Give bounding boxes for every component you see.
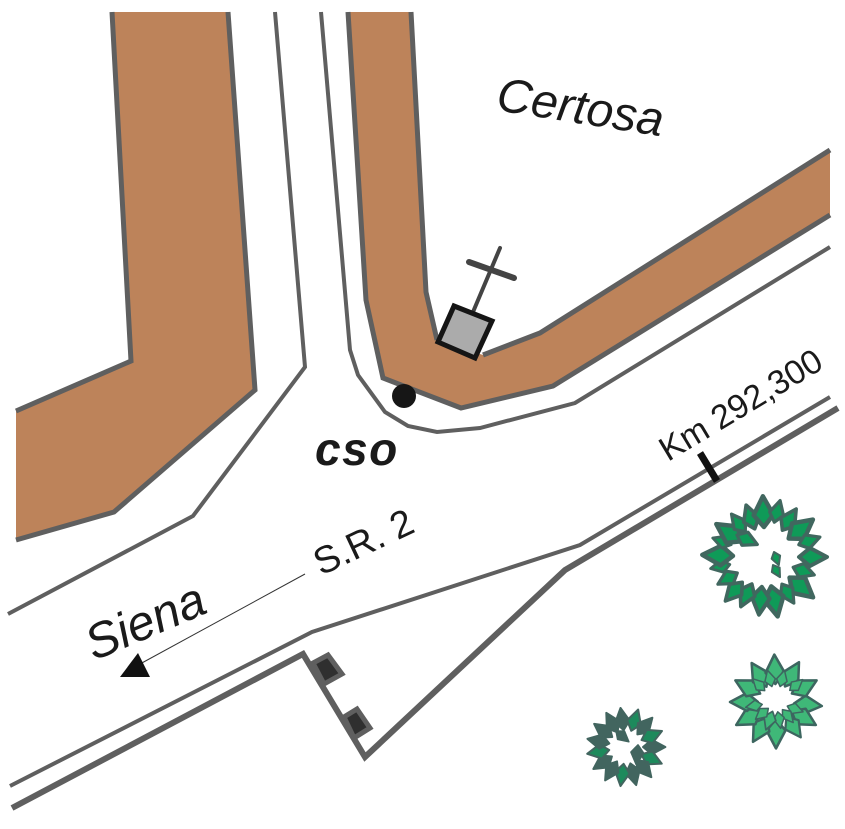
label: cso: cso bbox=[315, 423, 399, 475]
arrow to Siena bbox=[120, 574, 305, 677]
km tick bbox=[700, 453, 717, 481]
right brown block bbox=[348, 12, 830, 408]
label: Km 292,300: Km 292,300 bbox=[653, 342, 829, 469]
road edge: left side bbox=[8, 12, 305, 614]
left brown block bbox=[16, 12, 255, 540]
label: S.R. 2: S.R. 2 bbox=[307, 501, 421, 584]
icon: medium tree bbox=[730, 654, 823, 748]
label: Siena: Siena bbox=[77, 572, 214, 671]
road edge: lower thin bbox=[10, 397, 830, 786]
icon: large tree bbox=[702, 496, 827, 619]
label: Certosa: Certosa bbox=[493, 69, 668, 147]
road edge: right side bbox=[321, 12, 830, 432]
icon: small tree bbox=[586, 707, 665, 787]
icon: small square 1 bbox=[313, 655, 342, 684]
icon: cso dot bbox=[392, 384, 416, 408]
icon: cross mast bbox=[469, 248, 514, 312]
road edge: lower thick bbox=[12, 408, 838, 808]
icon: gray square monitor bbox=[438, 306, 492, 358]
icon: small square 2 bbox=[344, 709, 370, 738]
